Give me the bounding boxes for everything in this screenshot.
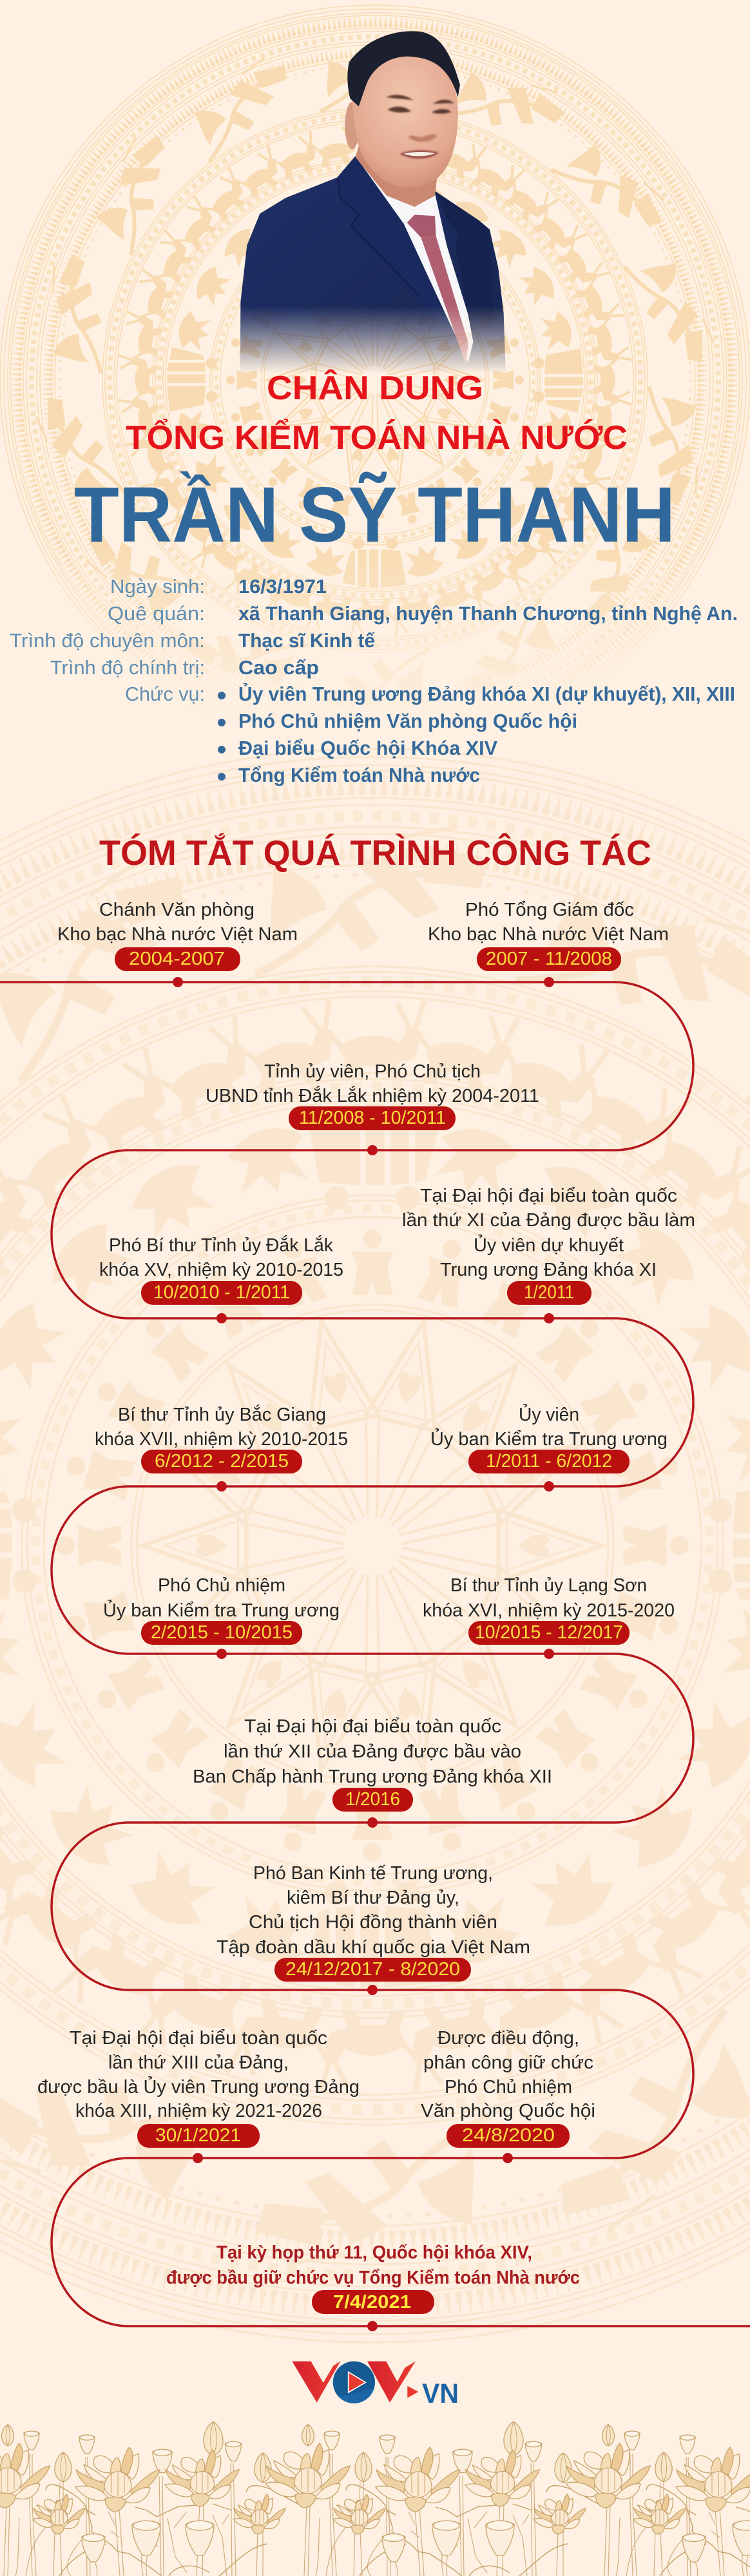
timeline item: 30/1/2021: khóa XIII, nhiệm kỳ 2021-2026 <box>75 2101 322 2121</box>
timeline item: 11/2008 - 10/2011: Tỉnh ủy viên, Phó Chủ tịch <box>264 1061 481 1082</box>
timeline item: 30/1/2021 <box>37 2028 360 2163</box>
timeline item: 11/2008 - 10/2011 <box>206 1061 539 1155</box>
professional level <box>10 629 376 652</box>
timeline item: 30/1/2021: lần thứ XIII của Đảng, <box>108 2052 289 2073</box>
timeline item: 24/8/2020: Văn phòng Quốc hội <box>421 2101 595 2121</box>
timeline item: 10/2010 - 1/2011: Phó Bí thư Tỉnh ủy Đắk Lắk <box>109 1235 333 1256</box>
timeline item: 2004-2007: 2004-2007 <box>129 949 225 969</box>
hometown: Quê quán: <box>108 602 205 625</box>
timeline item: 24/8/2020 <box>421 2028 595 2163</box>
title: name: TRẦN SỸ THANH <box>74 471 675 558</box>
timeline item: 30/1/2021: 30/1/2021 <box>155 2125 241 2146</box>
timeline item: 1/2011 - 6/2012: Ủy ban Kiểm tra Trung ương <box>430 1428 668 1450</box>
timeline item: 10/2010 - 1/2011: khóa XV, nhiệm kỳ 2010-2015 <box>99 1260 343 1280</box>
timeline item: 6/2012 - 2/2015: Bí thư Tỉnh ủy Bắc Giang <box>118 1404 326 1425</box>
timeline item: 2/2015 - 10/2015 <box>103 1575 340 1659</box>
timeline item: 6/2012 - 2/2015: khóa XVII, nhiệm kỳ 2010-2015 <box>95 1429 348 1450</box>
timeline item: 1/2016: Tại Đại hội đại biểu toàn quốc <box>244 1716 501 1737</box>
timeline item: 2/2015 - 10/2015: Ủy ban Kiểm tra Trung ương <box>103 1599 340 1621</box>
timeline item: 24/8/2020: phân công giữ chức <box>423 2052 593 2073</box>
timeline item: 2007 - 11/2008: 2007 - 11/2008 <box>486 949 612 969</box>
timeline item: 1/2016: lần thứ XII của Đảng được bầu vào <box>224 1741 521 1762</box>
timeline item: 1/2011: Tại Đại hội đại biểu toàn quốc <box>420 1186 677 1206</box>
timeline item: 7/4/2021 highlight <box>166 2242 580 2331</box>
political level: Cao cấp <box>238 656 319 679</box>
political level <box>50 656 319 679</box>
timeline item: 7/4/2021 highlight: Tại kỳ họp thứ 11, Quốc hội khóa XIV, <box>216 2242 532 2263</box>
timeline item: 2004-2007: Chánh Văn phòng <box>99 900 255 920</box>
timeline item: 2007 - 11/2008: Kho bạc Nhà nước Việt Nam <box>428 924 669 945</box>
timeline item: 24/12/2017 - 8/2020: 24/12/2017 - 8/2020 <box>285 1959 460 1980</box>
bronze drum pattern: top <box>0 5 750 755</box>
birth date: Ngày sinh: <box>110 575 205 598</box>
professional level: Thạc sĩ Kinh tế <box>238 629 376 652</box>
positions: Đại biểu Quốc hội Khóa XIV <box>238 737 497 759</box>
timeline item: 10/2015 - 12/2017: Bí thư Tỉnh ủy Lạng Sơn <box>450 1575 647 1596</box>
timeline item: 30/1/2021: Tại Đại hội đại biểu toàn quốc <box>70 2028 327 2049</box>
hair <box>347 31 460 106</box>
timeline item: 11/2008 - 10/2011: 11/2008 - 10/2011 <box>299 1108 446 1128</box>
timeline item: 30/1/2021: được bầu là Ủy viên Trung ương Đảng <box>37 2076 360 2098</box>
positions: Ủy viên Trung ương Đảng khóa XI (dự khuyết), XII, XIII <box>238 682 735 705</box>
timeline item: 10/2015 - 12/2017: 10/2015 - 12/2017 <box>475 1622 623 1643</box>
lotus border <box>0 2421 750 2576</box>
timeline item: 1/2011: Ủy viên dự khuyết <box>474 1234 624 1256</box>
profile information <box>10 575 738 786</box>
timeline item: 1/2011: Trung ương Đảng khóa XI <box>440 1260 657 1280</box>
timeline item: 2/2015 - 10/2015: Phó Chủ nhiệm <box>158 1575 285 1596</box>
timeline item: 24/8/2020: Phó Chủ nhiệm <box>445 2077 572 2098</box>
timeline item: 1/2011: lần thứ XI của Đảng được bầu làm <box>402 1210 695 1231</box>
title line 1: CHÂN DUNG <box>267 369 483 407</box>
hometown: xã Thanh Giang, huyện Thanh Chương, tỉnh Nghệ An. <box>238 602 738 625</box>
timeline item: 10/2010 - 1/2011: 10/2010 - 1/2011 <box>153 1282 290 1303</box>
neck <box>356 146 438 207</box>
timeline item: 24/8/2020: Được điều động, <box>438 2028 579 2049</box>
timeline item: 2007 - 11/2008 <box>428 900 669 987</box>
facial features <box>386 95 454 158</box>
timeline item: 24/8/2020: 24/8/2020 <box>462 2125 555 2146</box>
suit and tie <box>240 156 506 374</box>
timeline item: 6/2012 - 2/2015 <box>95 1404 348 1492</box>
timeline item: 1/2016: Ban Chấp hành Trung ương Đảng khóa XII <box>193 1766 552 1787</box>
timeline item: 1/2011: 1/2011 <box>524 1282 574 1303</box>
timeline serpentine line <box>0 982 750 2326</box>
title: role <box>126 369 628 457</box>
timeline item: 6/2012 - 2/2015: 6/2012 - 2/2015 <box>155 1451 289 1472</box>
bronze drum pattern: timeline <box>0 749 750 2342</box>
birth date: 16/3/1971 <box>238 575 327 598</box>
VOV.VN logo: VN <box>422 2378 459 2409</box>
timeline item: 1/2016 <box>193 1716 552 1828</box>
timeline item: 1/2016: 1/2016 <box>345 1789 400 1810</box>
timeline item: 2004-2007 <box>57 900 298 987</box>
positions: Chức vụ: <box>125 683 205 705</box>
professional level: Trình độ chuyên môn: <box>10 629 205 652</box>
timeline item: 1/2011 - 6/2012 <box>430 1403 668 1492</box>
timeline item: 1/2011 <box>402 1186 695 1323</box>
ear <box>345 102 360 149</box>
positions: Tổng Kiểm toán Nhà nước <box>238 764 480 786</box>
timeline item: 7/4/2021 highlight: được bầu giữ chức vụ Tổng Kiểm toán Nhà nước <box>166 2268 580 2288</box>
timeline item: 10/2015 - 12/2017 <box>423 1575 675 1659</box>
timeline item: 2007 - 11/2008: Phó Tổng Giám đốc <box>465 900 634 920</box>
timeline item: 7/4/2021 highlight: 7/4/2021 <box>333 2292 411 2313</box>
timeline item: 10/2010 - 1/2011 <box>99 1235 343 1323</box>
section heading: TÓM TẮT QUÁ TRÌNH CÔNG TÁC <box>99 833 651 873</box>
timeline item: 24/12/2017 - 8/2020: Chủ tịch Hội đồng thành viên <box>249 1912 497 1933</box>
timeline item: 11/2008 - 10/2011: UBND tỉnh Đắk Lắk nhiệm kỳ 2004-2011 <box>206 1085 539 1106</box>
birth date <box>110 575 327 598</box>
timeline item: 24/12/2017 - 8/2020: Tập đoàn dầu khí quốc gia Việt Nam <box>216 1937 530 1958</box>
smile <box>404 152 435 156</box>
timeline item: 10/2015 - 12/2017: khóa XVI, nhiệm kỳ 2015-2020 <box>423 1600 675 1621</box>
title line 2: TỔNG KIỂM TOÁN NHÀ NƯỚC <box>126 419 628 457</box>
portrait photo <box>240 31 506 374</box>
face <box>352 56 458 187</box>
timeline item: 1/2011 - 6/2012: Ủy viên <box>519 1403 579 1425</box>
positions: Phó Chủ nhiệm Văn phòng Quốc hội <box>238 710 577 732</box>
VOV.VN logo <box>292 2362 459 2409</box>
timeline item: 24/12/2017 - 8/2020 <box>216 1863 530 1995</box>
timeline item: 2/2015 - 10/2015: 2/2015 - 10/2015 <box>151 1622 293 1643</box>
timeline item: 24/12/2017 - 8/2020: Phó Ban Kinh tế Trung ương, <box>253 1863 493 1884</box>
timeline item: 2004-2007: Kho bạc Nhà nước Việt Nam <box>57 924 298 945</box>
timeline item: 1/2011 - 6/2012: 1/2011 - 6/2012 <box>486 1451 612 1472</box>
positions <box>125 682 735 786</box>
timeline item: 24/12/2017 - 8/2020: kiêm Bí thư Đảng ủy, <box>287 1888 459 1908</box>
political level: Trình độ chính trị: <box>50 656 205 679</box>
